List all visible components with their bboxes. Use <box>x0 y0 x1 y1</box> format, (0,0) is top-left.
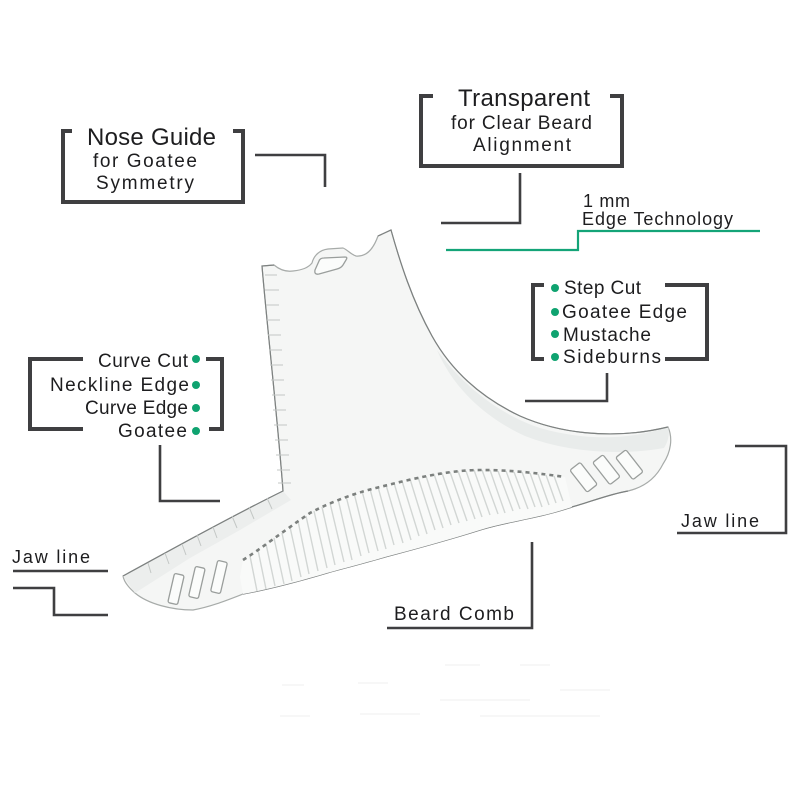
leader: curve cut list <box>160 445 220 501</box>
callout: nose guide <box>63 124 243 202</box>
callout: step cut list: Goatee Edge <box>562 302 687 323</box>
callout: transparent <box>421 85 622 166</box>
leader: step cut list <box>525 373 607 401</box>
comb teeth area <box>240 470 572 594</box>
callout: step cut list <box>533 278 707 368</box>
callout: step cut list: Sideburns <box>563 347 661 368</box>
callout: nose guide: for Goatee <box>93 151 197 172</box>
callout: jaw line left <box>12 547 108 615</box>
callout: step cut list: Mustache <box>563 325 651 346</box>
callout: transparent: Alignment <box>473 135 572 156</box>
faint ghost reflection <box>280 665 610 716</box>
callout: curve cut list <box>30 351 222 442</box>
callout: beard comb <box>387 542 532 628</box>
curve shading band <box>437 350 669 452</box>
callout: curve cut list: Neckline Edge <box>50 375 189 396</box>
callout: transparent: for Clear Beard <box>451 113 592 134</box>
callout: curve cut list: Curve Cut <box>98 351 189 372</box>
leader: transparent <box>441 173 520 223</box>
ruler ticks on the left edge <box>265 275 291 483</box>
callout: step cut list: Step Cut <box>564 278 642 299</box>
callout: beard comb: Beard Comb <box>394 604 514 625</box>
callout: jaw line right: Jaw line <box>681 511 759 531</box>
illustration: transparent beard shaping comb <box>123 230 671 610</box>
callout: 1 mm edge technology: Edge Technology <box>582 209 733 229</box>
right grip slots <box>570 450 643 492</box>
callout: curve cut list: Goatee <box>118 421 187 442</box>
lower left ruler shading band <box>123 491 291 593</box>
callout: curve cut list: Curve Edge <box>85 398 188 419</box>
callout: transparent: Transparent <box>458 85 590 112</box>
leader: nose guide <box>255 155 325 187</box>
callout: jaw line right <box>677 446 786 533</box>
callout: 1 mm edge technology: 1 mm <box>583 191 630 211</box>
comb body <box>123 230 671 610</box>
nose guide slot <box>315 257 347 274</box>
left grip slots <box>168 560 227 605</box>
callout: nose guide: Symmetry <box>96 173 194 194</box>
ruler ticks on the lower left edge <box>148 498 272 573</box>
comb teeth <box>243 470 565 591</box>
callout: jaw line left: Jaw line <box>12 547 90 567</box>
callout: 1 mm edge technology <box>446 191 760 250</box>
dark edge highlights <box>123 230 668 594</box>
callout: nose guide: Nose Guide <box>87 124 216 151</box>
